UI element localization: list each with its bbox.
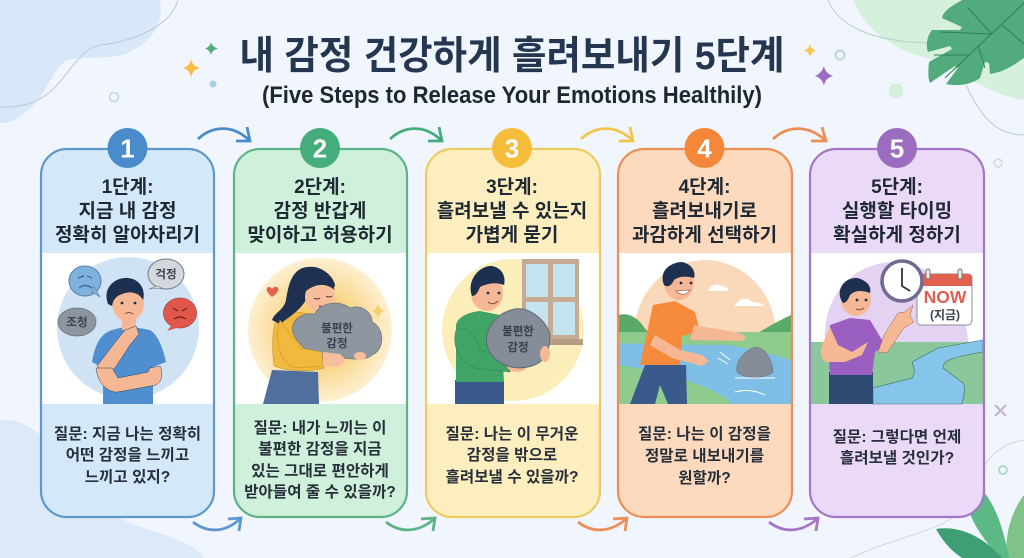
- question text: 받아들여 줄 수 있을까?: [244, 483, 396, 501]
- icon: leaves bottom right: [936, 478, 1024, 558]
- step heading: [55, 176, 200, 246]
- icon: window: [520, 259, 583, 345]
- question text: [638, 425, 771, 487]
- panel: step 3: [426, 128, 600, 517]
- subtitle: (Five Steps to Release Your Emotions Healthily): [262, 82, 762, 109]
- step heading: [247, 176, 393, 246]
- step heading: 실행할 타이밍: [842, 200, 952, 222]
- question text: 정말로 내보내기를: [645, 447, 764, 465]
- question text: 어떤 감정을 느끼고: [66, 446, 189, 464]
- arrow: step 2 to 3 top: [390, 127, 442, 141]
- panel: step 4: [618, 128, 792, 517]
- bubble: worry: [148, 259, 184, 289]
- question text: 흘려보낼 것인가?: [840, 449, 954, 467]
- rock label: 불편한: [321, 321, 353, 335]
- arrow: step 1 to 2 bottom: [193, 518, 241, 531]
- panel: step 1: [41, 128, 214, 517]
- step heading: 감정 반갑게: [274, 200, 366, 222]
- arrow: step 3 to 4 bottom: [578, 518, 627, 531]
- bubble: angry: [164, 298, 196, 331]
- icon: calendar NOW: (지금): [930, 308, 960, 322]
- question text: 불편한 감정을 지금: [258, 440, 382, 458]
- arrow: step 1 to 2 top: [198, 127, 250, 141]
- question text: 질문: 나는 이 감정을: [638, 425, 771, 443]
- bubble: worry: 걱정: [155, 268, 177, 281]
- illustration: man carrying rock by window: [442, 259, 584, 404]
- arrow: step 3 to 4 top: [581, 127, 633, 141]
- step heading: 가볍게 묻기: [466, 224, 558, 246]
- step number badge: [684, 128, 724, 168]
- panel: step 2: [234, 128, 407, 517]
- question text: 느끼고 있지?: [85, 468, 170, 486]
- step heading: 5단계:: [871, 176, 923, 198]
- panel: step 5: [810, 128, 984, 517]
- title: 내 감정 건강하게 흘려보내기 5단계: [240, 35, 784, 78]
- icon: rock in river: [737, 347, 773, 377]
- step heading: 흘려보낼 수 있는지: [437, 200, 587, 222]
- step heading: 정확히 알아차리기: [55, 224, 200, 246]
- bubble: anxious: 조청: [66, 315, 88, 329]
- question text: 질문: 나는 이 무거운: [446, 425, 578, 443]
- bubble: sad: [69, 266, 101, 297]
- pointing arm: [878, 305, 914, 353]
- step heading: 맞이하고 허용하기: [247, 224, 393, 246]
- step heading: 1단계:: [102, 176, 153, 198]
- icon: calendar NOW: [917, 269, 972, 325]
- step number badge: 2: [313, 134, 327, 164]
- step number badge: [877, 128, 917, 168]
- arrow: step 4 to 5 bottom: [769, 518, 818, 531]
- question text: [54, 425, 201, 486]
- question text: 감정을 밖으로: [467, 446, 557, 464]
- question text: [446, 425, 578, 486]
- step heading: 3단계:: [486, 176, 538, 198]
- step number badge: [300, 128, 340, 168]
- question text: 흘려보낼 수 있을까?: [446, 468, 578, 486]
- icon: clock: [882, 261, 922, 301]
- illustration: man thinking with emotion bubbles: [57, 257, 199, 404]
- illustration: woman hugging grey cloud: [248, 258, 392, 404]
- step number badge: [108, 128, 148, 168]
- icon: monstera leaf top right: [927, 0, 1024, 85]
- question text: 질문: 내가 느끼는 이: [254, 419, 386, 437]
- question text: 원할까?: [678, 469, 731, 487]
- question text: 질문: 그렇다면 언제: [833, 428, 961, 446]
- step number badge: 3: [505, 134, 519, 164]
- arrow: step 4 to 5 top: [773, 127, 826, 141]
- question text: 있는 그대로 편안하게: [251, 462, 389, 480]
- arrow: step 2 to 3 bottom: [386, 518, 435, 531]
- step heading: 확실하게 정하기: [833, 224, 961, 246]
- step heading: 과감하게 선택하기: [632, 224, 777, 246]
- step heading: 지금 내 감정: [79, 200, 176, 222]
- question text: 질문: 지금 나는 정확히: [54, 425, 201, 443]
- question text: [833, 428, 961, 467]
- step heading: [632, 176, 777, 246]
- step heading: [437, 176, 587, 246]
- step heading: 4단계:: [679, 176, 730, 198]
- illustration: man carrying rock by window: 감정: [507, 341, 529, 354]
- illustration: man releasing rock into river: [619, 260, 791, 404]
- question text: [244, 419, 396, 501]
- step heading: 흘려보내기로: [652, 200, 757, 222]
- step number badge: [492, 128, 532, 168]
- step number badge: 5: [890, 134, 904, 164]
- step heading: [833, 176, 961, 246]
- illustration: woman hugging grey cloud: 감정: [326, 337, 348, 350]
- illustration: man pointing at clock and calendar by river: [811, 261, 983, 404]
- step heading: 2단계:: [294, 176, 346, 198]
- step number badge: 4: [697, 134, 712, 164]
- bubble: anxious: [58, 308, 97, 336]
- step number badge: 1: [120, 134, 135, 164]
- rock label: 불편한: [502, 324, 534, 338]
- icon: heart: [267, 287, 278, 297]
- icon: calendar NOW: NOW: [924, 287, 967, 307]
